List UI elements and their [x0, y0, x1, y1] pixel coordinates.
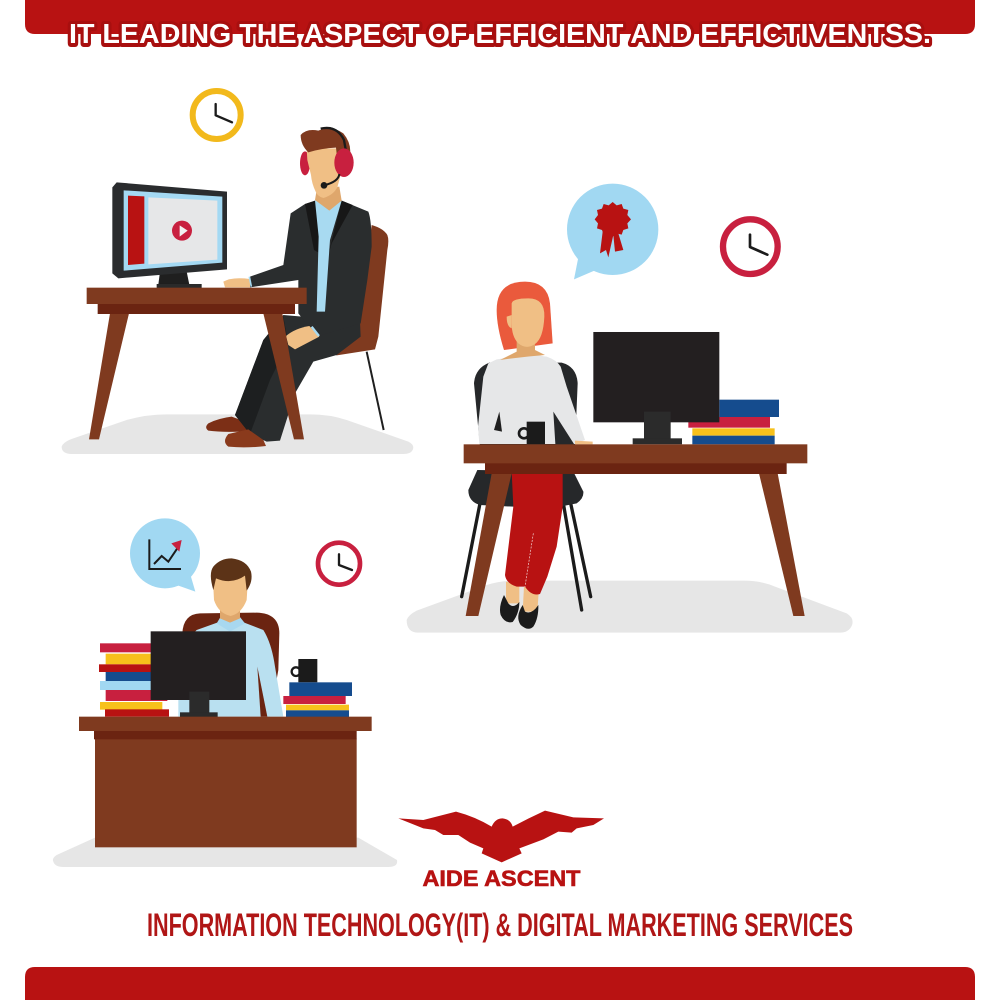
desk — [464, 444, 807, 616]
stack of books: left — [99, 643, 169, 717]
speech bubble: award — [567, 184, 658, 279]
scene: woman with mug at desk — [407, 184, 853, 633]
top banner — [25, 0, 975, 34]
computer monitor — [151, 631, 246, 717]
stack of books and mug: right — [283, 659, 352, 717]
wordmark: AIDE ASCENT — [422, 866, 581, 891]
man with headset — [206, 128, 372, 447]
computer monitor — [112, 182, 227, 288]
bottom banner — [25, 967, 975, 1000]
floor shadow — [407, 581, 853, 633]
woman — [478, 282, 593, 629]
speech bubble: growth chart — [130, 518, 200, 592]
scene: man behind desk with books — [53, 518, 397, 867]
stack of books — [688, 400, 779, 444]
icon: yellow clock — [193, 91, 241, 139]
desk — [87, 288, 307, 439]
icon: crimson clock — [318, 543, 360, 585]
brown office chair — [182, 613, 279, 717]
chair — [317, 225, 388, 430]
seated man — [178, 558, 283, 717]
floor shadow — [62, 414, 413, 454]
floor shadow — [53, 838, 397, 867]
title: IT LEADING THE ASPECT OF EFFICIENT AND EFFICTIVENTSS. — [69, 18, 931, 49]
icon: eagle — [398, 811, 604, 862]
scene: man with headset at desk — [62, 91, 413, 454]
logo: eagle and wordmark — [398, 811, 604, 891]
black chair — [462, 363, 591, 610]
icon: crimson clock — [723, 219, 778, 274]
desk — [79, 717, 372, 847]
computer monitor — [593, 332, 719, 444]
